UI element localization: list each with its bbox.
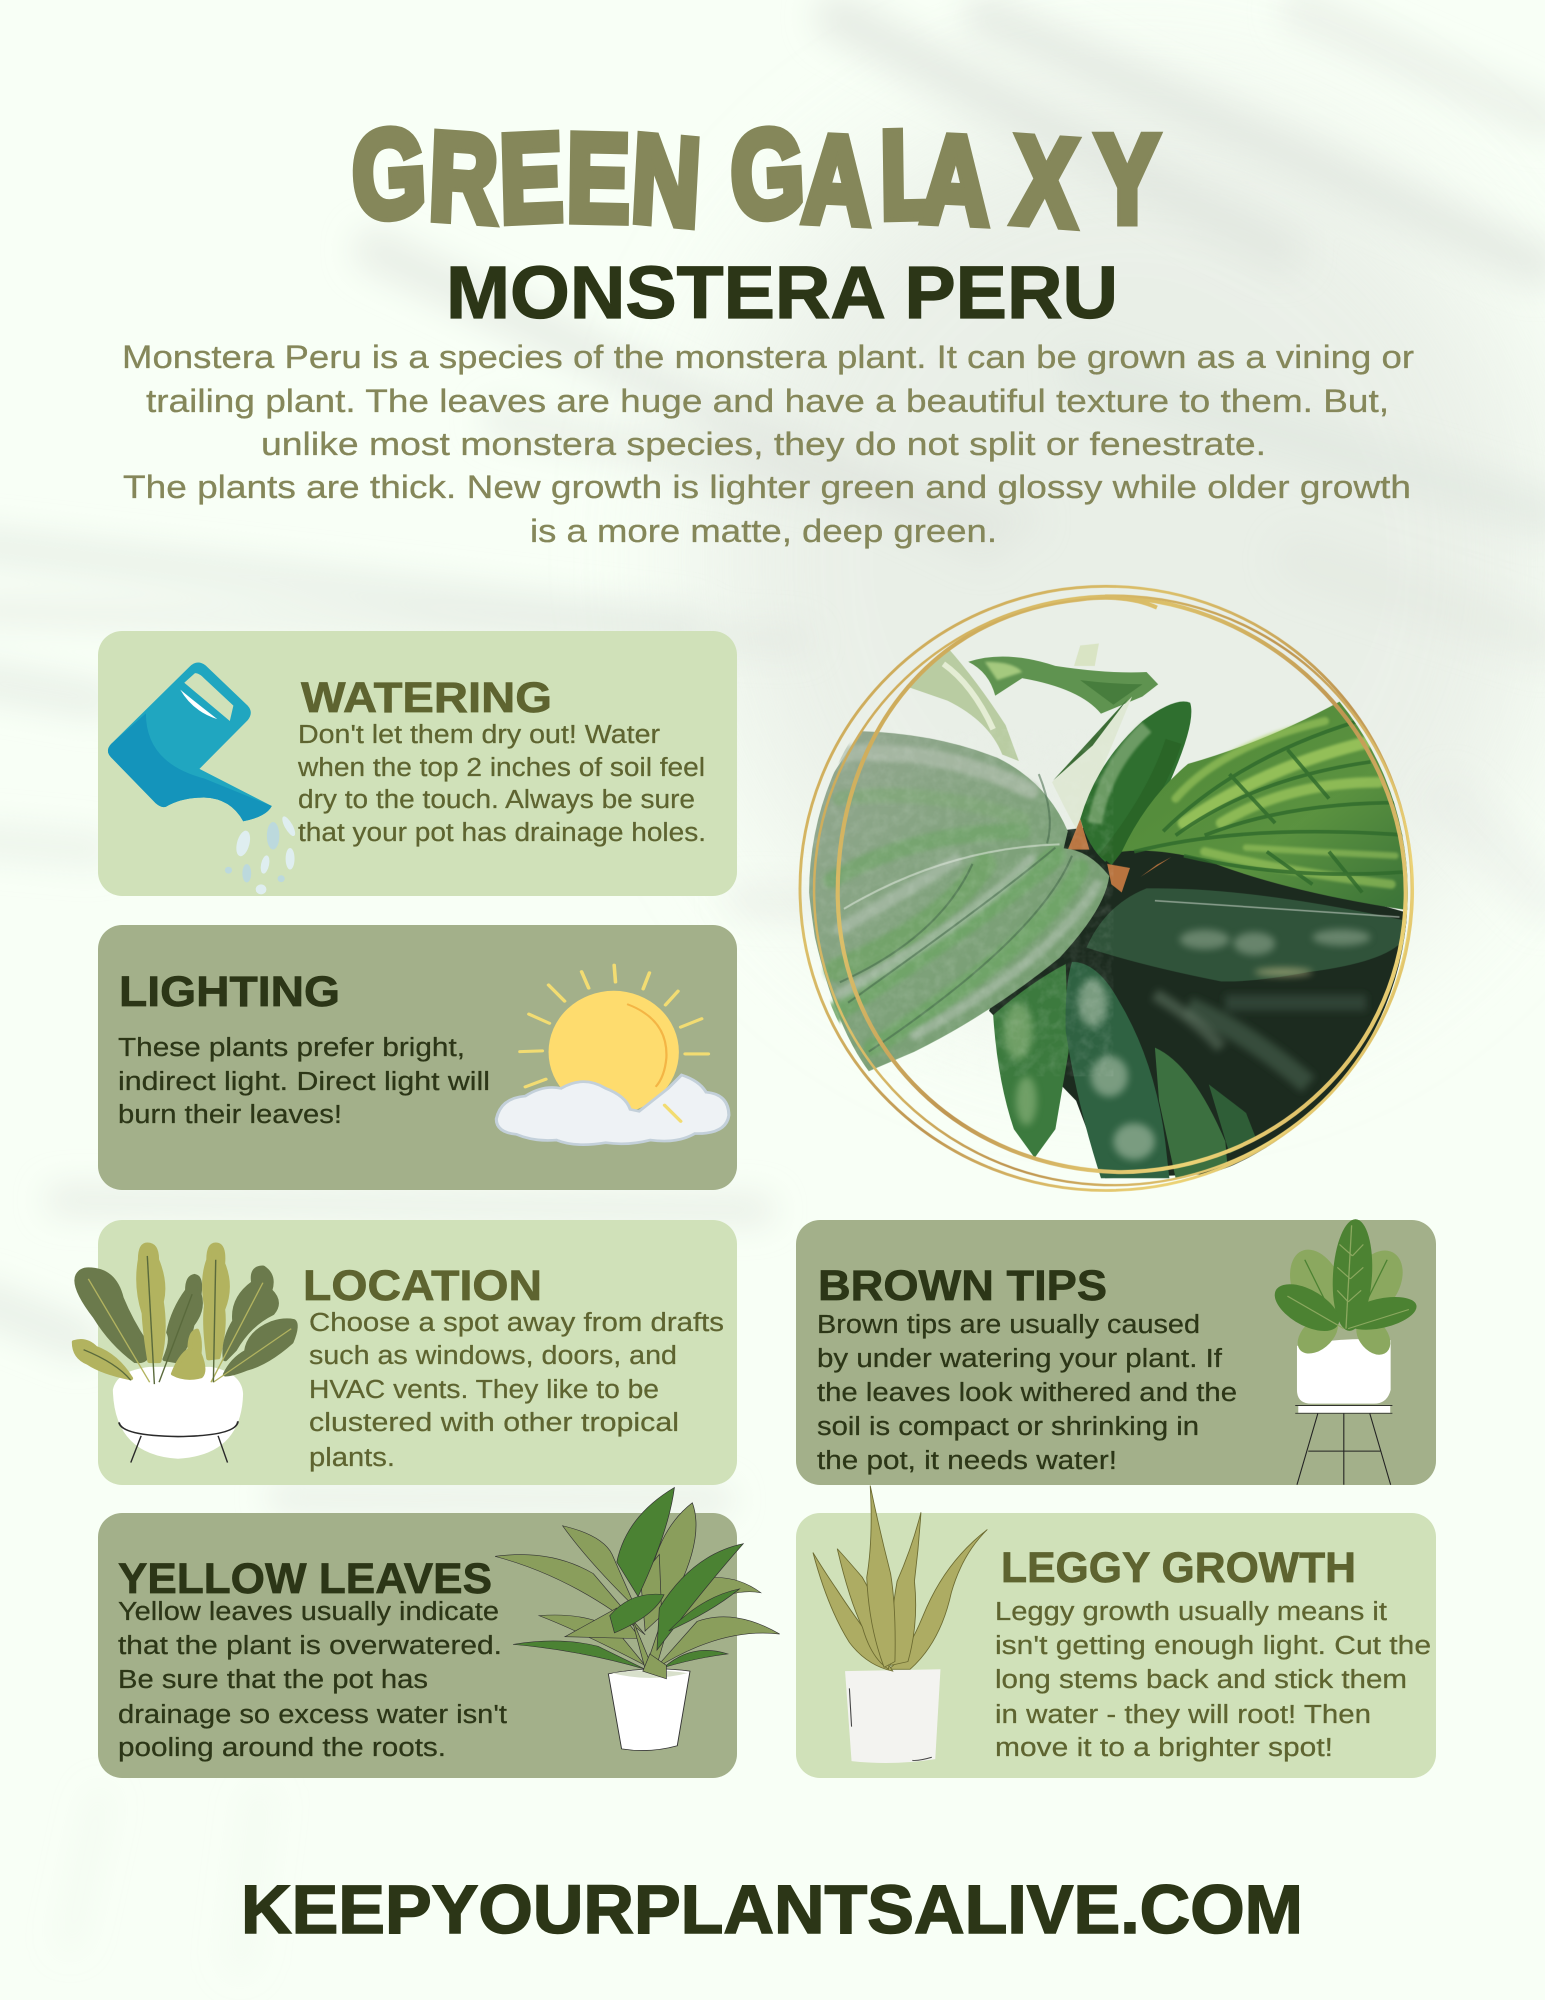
dark backdrop behind leaves <box>989 823 1408 1178</box>
body: leggy growth: move it to a brighter spot! <box>995 1734 1333 1762</box>
icon: sun and cloud <box>496 965 729 1145</box>
body: lighting: burn their leaves! <box>118 1101 342 1129</box>
body: brown tips: soil is compact or shrinking in <box>817 1413 1199 1441</box>
icon: potted plant on stand <box>74 1244 295 1463</box>
heading: leggy growth: LEGGY GROWTH <box>1001 1544 1356 1592</box>
body: yellow leaves <box>118 1598 507 1762</box>
intro paragraph <box>122 339 1414 549</box>
body: leggy growth: in water - they will root! Then <box>995 1701 1371 1729</box>
body: leggy growth: isn't getting enough light. Cut the <box>995 1632 1431 1660</box>
footer website: KEEPYOURPLANTSALIVE.COM <box>241 1871 1303 1948</box>
panel: leggy growth <box>796 1486 1436 1778</box>
body: leggy growth <box>995 1598 1431 1762</box>
body: location <box>309 1309 724 1472</box>
body: watering: dry to the touch. Always be sure <box>298 786 695 814</box>
body: brown tips: the leaves look withered and the <box>817 1379 1237 1407</box>
body: leggy growth: Leggy growth usually means it <box>995 1598 1387 1626</box>
heading: lighting: LIGHTING <box>119 968 340 1016</box>
body: yellow leaves: that the plant is overwatered. <box>118 1632 502 1660</box>
body: brown tips: by under watering your plant. If <box>817 1345 1223 1373</box>
photo: monstera peru in gold ring <box>798 584 1414 1192</box>
body: watering: that your pot has drainage holes. <box>298 819 706 847</box>
heading: brown tips: BROWN TIPS <box>818 1262 1107 1310</box>
subtitle: Monstera Peru: MONSTERA PERU <box>446 251 1118 334</box>
panel: brown tips <box>796 1218 1436 1485</box>
body: watering: Don't let them dry out! Water <box>298 721 661 749</box>
body: brown tips: the pot, it needs water! <box>817 1447 1117 1475</box>
icon: leafy plant in white pot <box>495 1487 780 1751</box>
body: yellow leaves: drainage so excess water isn't <box>118 1701 507 1729</box>
body: lighting: These plants prefer bright, <box>118 1034 465 1062</box>
body: yellow leaves: Yellow leaves usually indicate <box>118 1598 499 1626</box>
body: lighting: indirect light. Direct light will <box>118 1068 490 1096</box>
body: brown tips: Brown tips are usually caused <box>817 1311 1200 1339</box>
bright striped leaf <box>1122 701 1412 911</box>
body: yellow leaves: Be sure that the pot has <box>118 1666 428 1694</box>
body: watering: when the top 2 inches of soil feel <box>297 754 705 782</box>
gold ring <box>736 519 1491 1262</box>
intro paragraph: is a more matte, deep green. <box>530 513 997 549</box>
icon: watering can <box>108 663 298 894</box>
intro paragraph: The plants are thick. New growth is lighter green and glossy while older growth <box>123 469 1411 505</box>
photo of leaves <box>806 643 1412 1178</box>
heading: yellow leaves: YELLOW LEAVES <box>118 1555 492 1603</box>
icon: spiky plant in speckled pot <box>813 1486 987 1763</box>
panel: watering <box>98 631 737 896</box>
body: location: plants. <box>309 1444 395 1472</box>
lower centre leaves <box>1155 1048 1227 1178</box>
icon: plant on stool <box>1266 1218 1421 1485</box>
title: Green Galaxy: GREEN GALAXY <box>350 103 1159 253</box>
very dark lower right leaf <box>1155 995 1366 1084</box>
dark horizontal leaf <box>1086 888 1408 982</box>
body: brown tips <box>817 1311 1237 1475</box>
body: watering <box>297 721 706 847</box>
body: leggy growth: long stems back and stick them <box>995 1666 1407 1694</box>
intro paragraph: unlike most monstera species, they do not split or fenestrate. <box>261 426 1266 462</box>
body: location: Choose a spot away from drafts <box>309 1309 724 1337</box>
body: location: HVAC vents. They like to be <box>309 1376 659 1404</box>
heading: watering: WATERING <box>301 674 552 722</box>
panel: yellow leaves <box>98 1487 780 1778</box>
panel: location <box>74 1220 737 1485</box>
intro paragraph: trailing plant. The leaves are huge and have a beautiful texture to them. But, <box>146 383 1389 419</box>
intro paragraph: Monstera Peru is a species of the monstera plant. It can be grown as a vining or <box>122 339 1414 375</box>
body: location: such as windows, doors, and <box>309 1342 677 1370</box>
body: yellow leaves: pooling around the roots. <box>118 1734 446 1762</box>
heading: location: LOCATION <box>303 1262 542 1310</box>
body: lighting <box>118 1034 490 1129</box>
body: location: clustered with other tropical <box>309 1409 679 1437</box>
large silver leaf <box>806 731 1109 1071</box>
panel: lighting <box>98 925 737 1190</box>
